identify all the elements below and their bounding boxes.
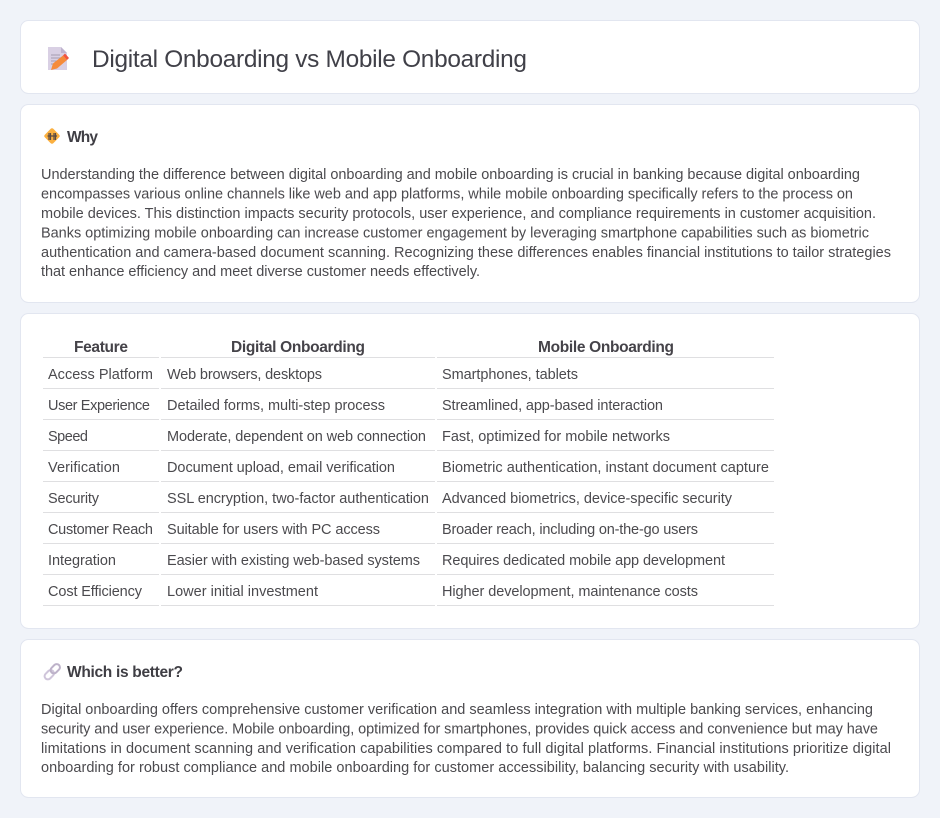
- row: access platform: Smartphones, tablets: [442, 367, 578, 383]
- row: user experience: Detailed forms, multi-step process: [167, 398, 385, 414]
- text block: why paragraph: authentication and camera-based document scanning. Recognizing these differences enables financial institutions to tailor strategies: [41, 245, 891, 261]
- text block: why paragraph: that enhance efficiency and meet diverse customer needs effectively.: [41, 264, 480, 280]
- row: integration: Integration: [48, 553, 116, 569]
- table header: Digital Onboarding: [231, 339, 365, 356]
- row: user experience: [43, 398, 774, 420]
- panel: comparison table: [20, 314, 920, 628]
- panel: why: [20, 104, 920, 302]
- icon: document with pencil: [48, 47, 69, 70]
- table header: Mobile Onboarding: [538, 339, 674, 356]
- row: user experience: Streamlined, app-based interaction: [442, 398, 663, 414]
- text block: why paragraph: [41, 167, 891, 280]
- row: verification: [43, 460, 774, 482]
- row: security: [43, 491, 774, 513]
- icon: chain link: [43, 663, 61, 681]
- text block: why paragraph: mobile devices. This distinction impacts security protocols, user experience, and compliance requirements in customer acquisition.: [41, 206, 876, 222]
- text block: which is better paragraph: [41, 702, 891, 776]
- icon: warning diamond: [44, 128, 60, 144]
- row: integration: Easier with existing web-based systems: [167, 553, 420, 569]
- text block: which is better paragraph: Digital onboarding offers comprehensive customer verification and seamless integration with multiple banking services, enhancing: [41, 702, 873, 718]
- row: speed: Speed: [48, 429, 88, 445]
- row: security: SSL encryption, two-factor authentication: [167, 491, 429, 507]
- heading: why: Why: [67, 129, 98, 146]
- text block: which is better paragraph: limitations in document scanning and verification capabilities compared to full digital platforms. Financial institutions prioritize digital: [41, 741, 891, 757]
- row: customer reach: Broader reach, including on-the-go users: [442, 522, 698, 538]
- panel: which is better: [20, 640, 920, 798]
- text block: why paragraph: Understanding the difference between digital onboarding and mobile onboarding is crucial in banking because digital onboarding: [41, 167, 860, 183]
- text block: which is better paragraph: security and user experience. Mobile onboarding, optimized for smartphones, provides quick access and convenience but may have: [41, 722, 878, 738]
- row: integration: [43, 553, 774, 575]
- text block: why paragraph: encompasses various online channels like web and app platforms, while mobile onboarding specifically refers to the process on: [41, 186, 853, 202]
- row: speed: Moderate, dependent on web connection: [167, 429, 426, 445]
- row: verification: Biometric authentication, instant document capture: [442, 460, 769, 476]
- row: user experience: User Experience: [48, 398, 150, 414]
- panel: header: [20, 20, 920, 94]
- table header: [43, 339, 774, 358]
- row: security: Advanced biometrics, device-specific security: [442, 491, 733, 507]
- title: Digital Onboarding vs Mobile Onboarding: [92, 46, 527, 73]
- heading: which is better: Which is better?: [67, 664, 183, 681]
- row: verification: Document upload, email verification: [167, 460, 395, 476]
- row: integration: Requires dedicated mobile app development: [442, 553, 725, 569]
- row: customer reach: Customer Reach: [48, 522, 153, 538]
- row: access platform: [43, 367, 774, 389]
- row: customer reach: [43, 522, 774, 544]
- row: verification: Verification: [48, 460, 120, 476]
- row: customer reach: Suitable for users with PC access: [167, 522, 380, 538]
- row: security: Security: [48, 491, 100, 507]
- row: cost efficiency: [43, 584, 774, 606]
- table header: Feature: [74, 339, 128, 356]
- text block: which is better paragraph: onboarding for robust compliance and mobile onboarding for customer accessibility, balancing security with usability.: [41, 760, 789, 776]
- row: cost efficiency: Higher development, maintenance costs: [442, 584, 698, 600]
- row: access platform: Access Platform: [48, 367, 153, 383]
- row: cost efficiency: Cost Efficiency: [48, 584, 143, 600]
- row: speed: [43, 429, 774, 451]
- row: speed: Fast, optimized for mobile networks: [442, 429, 670, 445]
- text block: why paragraph: Banks optimizing mobile onboarding can increase customer engagement by leveraging smartphone capabilities such as biometric: [41, 226, 869, 242]
- row: cost efficiency: Lower initial investment: [167, 584, 318, 600]
- row: access platform: Web browsers, desktops: [167, 367, 322, 383]
